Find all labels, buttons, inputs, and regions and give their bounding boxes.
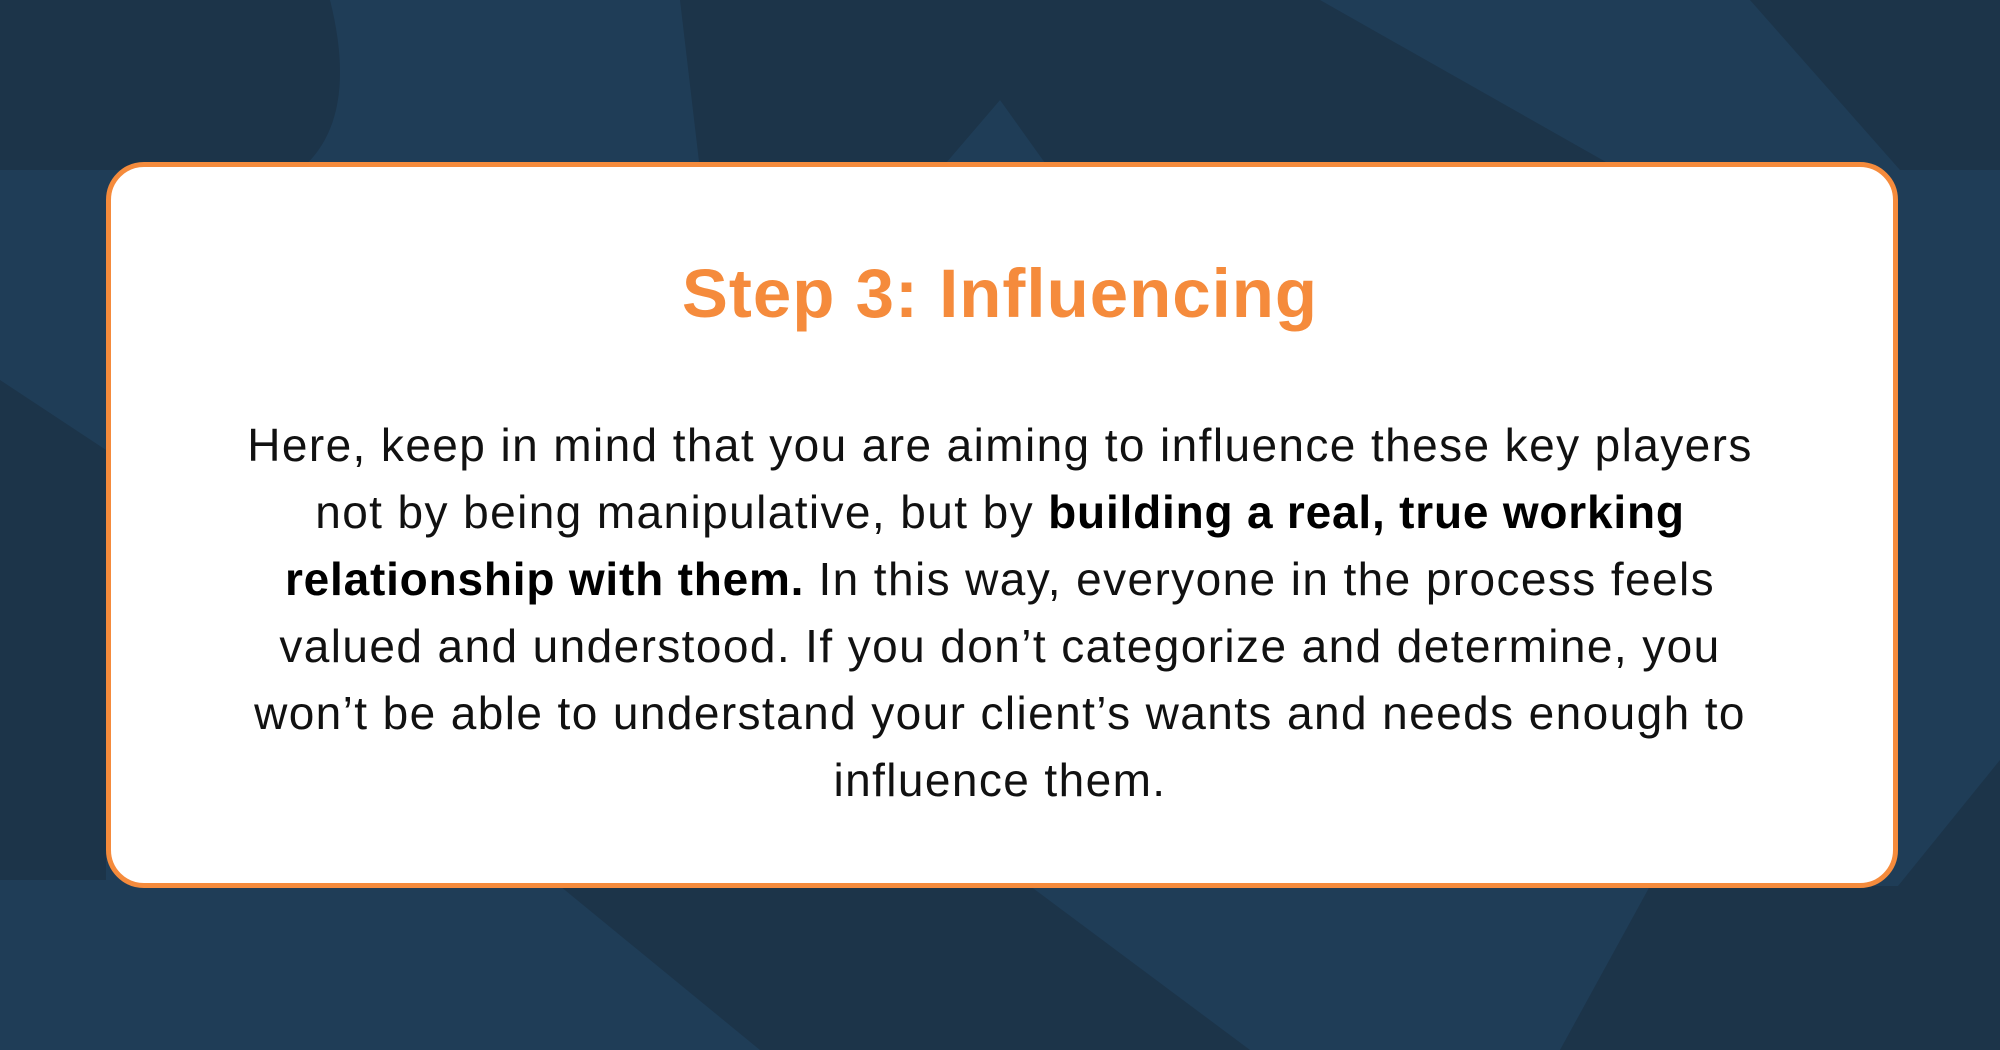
body text: won’t be able to understand your client’s wants and needs enough to bbox=[254, 687, 1746, 739]
body text: influence them. bbox=[834, 754, 1166, 806]
body text: relationship with them. In this way, everyone in the process feels bbox=[285, 553, 1715, 605]
body text bbox=[247, 419, 1753, 806]
body text: not by being manipulative, but by building a real, true working bbox=[315, 486, 1685, 538]
body text: Here, keep in mind that you are aiming to influence these key players bbox=[247, 419, 1753, 471]
title: Step 3: Influencing bbox=[682, 255, 1318, 332]
card panel bbox=[106, 162, 1898, 888]
body text: valued and understood. If you don’t categorize and determine, you bbox=[279, 620, 1721, 672]
